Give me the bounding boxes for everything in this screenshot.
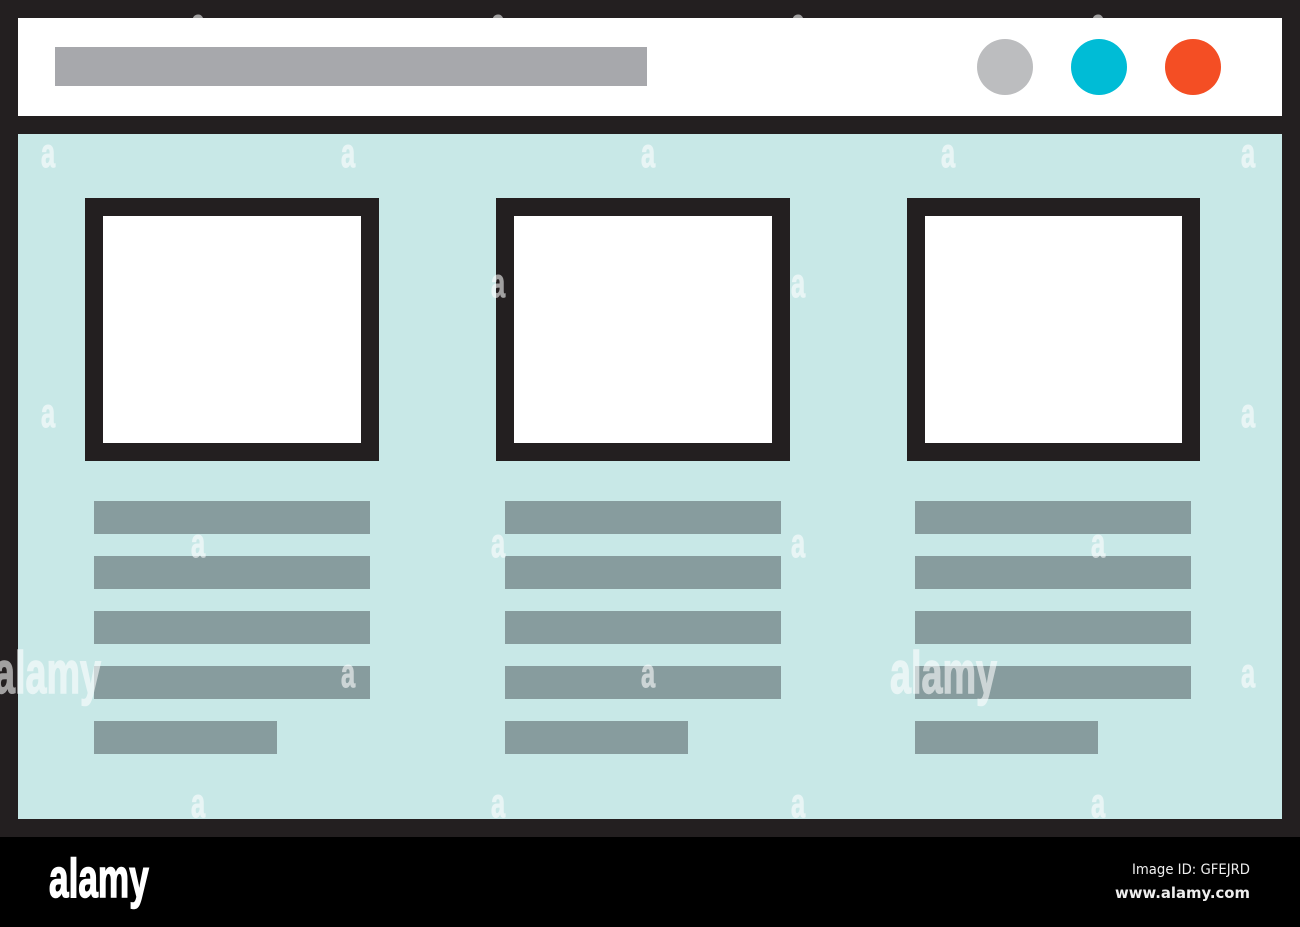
column 1 text lines [94, 501, 370, 754]
watermark overlay: a [1241, 651, 1256, 697]
footer band [0, 837, 1300, 927]
watermark overlay: a [191, 1, 206, 47]
content panel [18, 134, 1282, 819]
watermark overlay: a [41, 391, 56, 437]
site url: www.alamy.com [1115, 884, 1250, 902]
watermark overlay: a [491, 1, 506, 47]
column 2 image placeholder [496, 198, 790, 461]
watermark overlay: a [1091, 521, 1106, 567]
watermark overlay: a [341, 651, 356, 697]
column 2 text lines [505, 501, 781, 754]
watermark overlay: a [491, 781, 506, 827]
watermark overlay: a [341, 131, 356, 177]
image id: Image ID: GFEJRD [1132, 862, 1250, 878]
icon: orange window button [1165, 39, 1221, 95]
watermark overlay: a [191, 521, 206, 567]
watermark overlay: a [791, 781, 806, 827]
watermark overlay: a [941, 131, 956, 177]
icon: cyan window button [1071, 39, 1127, 95]
watermark overlay: a [791, 1, 806, 47]
column 3 image placeholder [907, 198, 1200, 461]
watermark overlay: a [1241, 391, 1256, 437]
icon: grey window button [977, 39, 1033, 95]
column 3 text lines [915, 501, 1191, 754]
watermark overlay: a [191, 781, 206, 827]
watermark overlay: a [641, 651, 656, 697]
watermark overlay: a [1091, 781, 1106, 827]
watermark overlay: a [791, 261, 806, 307]
watermark overlay: a [641, 131, 656, 177]
watermark overlay: a [41, 131, 56, 177]
watermark overlay: a [791, 521, 806, 567]
watermark overlay: a [491, 521, 506, 567]
watermark overlay: a [1091, 1, 1106, 47]
address bar [55, 47, 647, 86]
watermark overlay: a [1241, 131, 1256, 177]
footer logo: alamy [49, 847, 149, 909]
column 1 image placeholder [85, 198, 379, 461]
watermark overlay: a [491, 261, 506, 307]
watermark overlay: alamy [890, 641, 997, 706]
header bar [18, 18, 1282, 116]
